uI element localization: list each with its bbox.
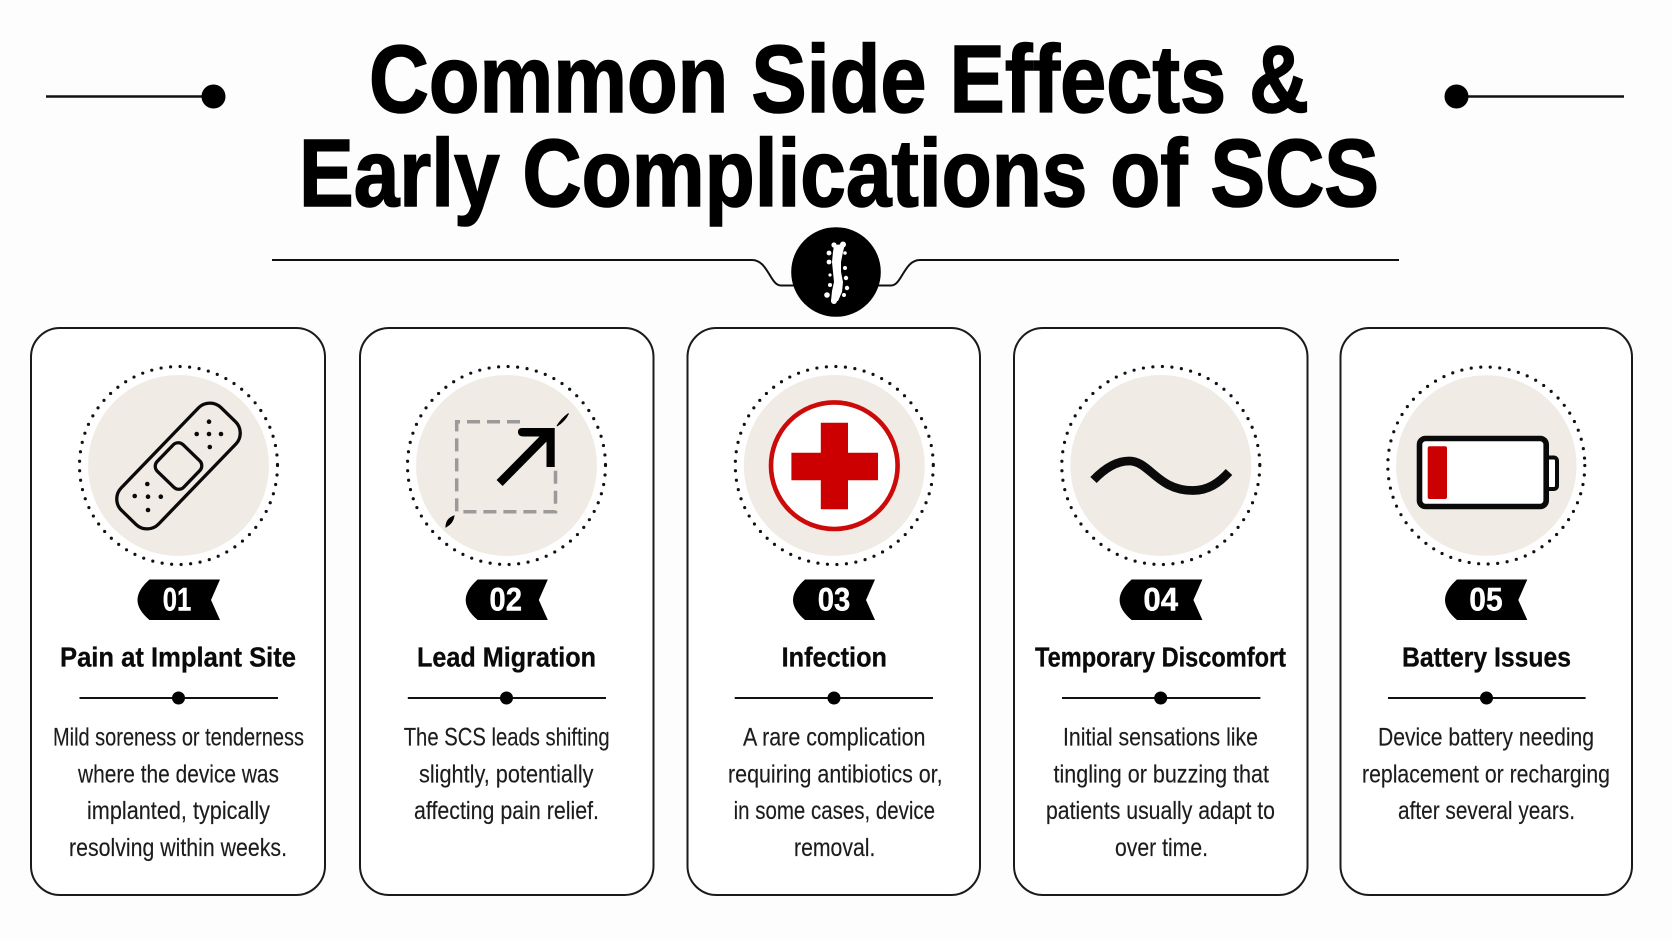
card frame (688, 328, 980, 895)
description: where the device was (77, 760, 279, 788)
number badge 03: 03 (818, 582, 850, 618)
description: The SCS leads shifting (404, 724, 610, 752)
number badge 03 (793, 580, 875, 620)
title: Common Side Effects & (369, 26, 1309, 133)
description (1362, 724, 1610, 825)
description: in some cases, device (734, 797, 935, 825)
icon: medical cross (735, 366, 933, 564)
description: implanted, typically (87, 797, 270, 825)
description (1046, 724, 1275, 862)
description: Device battery needing (1378, 724, 1594, 752)
description: resolving within weeks. (69, 834, 287, 862)
number badge 02 (466, 580, 548, 620)
description: tingling or buzzing that (1054, 760, 1269, 788)
description: replacement or recharging (1362, 760, 1610, 788)
description: A rare complication (743, 724, 926, 752)
number badge 05: 05 (1469, 582, 1503, 618)
heading: Infection (782, 642, 887, 672)
card frame (1340, 328, 1632, 895)
number badge 02: 02 (489, 582, 522, 618)
title (299, 26, 1379, 227)
panel: pain at implant site (31, 328, 325, 895)
heading: Lead Migration (417, 642, 596, 672)
divider (735, 692, 933, 704)
description: over time. (1115, 834, 1208, 862)
description: Mild soreness or tenderness (53, 724, 304, 752)
divider (1062, 692, 1260, 704)
divider (408, 692, 606, 704)
description (53, 724, 304, 862)
title: Early Complications of SCS (299, 120, 1379, 227)
icon: migrating arrow (408, 366, 606, 564)
description: requiring antibiotics or, (728, 760, 943, 788)
description: after several years. (1398, 797, 1575, 825)
description: Initial sensations like (1063, 724, 1258, 752)
icon: spine medallion (791, 227, 881, 317)
description: affecting pain relief. (414, 797, 599, 825)
card frame (31, 328, 325, 895)
heading: Pain at Implant Site (60, 642, 296, 672)
description: slightly, potentially (419, 760, 594, 788)
left title ornament (46, 84, 226, 108)
number badge 04: 04 (1143, 582, 1178, 618)
number badge 01: 01 (163, 582, 191, 618)
number badge 04 (1120, 580, 1202, 620)
panel: infection (688, 328, 980, 895)
icon: low battery (1388, 367, 1585, 564)
card frame (360, 328, 654, 895)
description (728, 724, 943, 862)
card frame (1014, 328, 1308, 895)
panel: temporary discomfort (1014, 328, 1308, 895)
header divider (272, 260, 1399, 286)
heading: Battery Issues (1402, 642, 1571, 672)
right title ornament (1444, 84, 1624, 108)
description: removal. (794, 834, 875, 862)
icon: wave (1062, 366, 1260, 564)
panel: lead migration (360, 328, 654, 895)
divider (1388, 692, 1586, 704)
description (404, 724, 610, 825)
number badge 05 (1445, 580, 1527, 620)
divider (80, 692, 278, 704)
icon: bandage (80, 366, 278, 564)
number badge 01 (138, 580, 220, 620)
description: patients usually adapt to (1046, 797, 1275, 825)
heading: Temporary Discomfort (1035, 642, 1286, 672)
panel: battery issues (1340, 328, 1632, 895)
